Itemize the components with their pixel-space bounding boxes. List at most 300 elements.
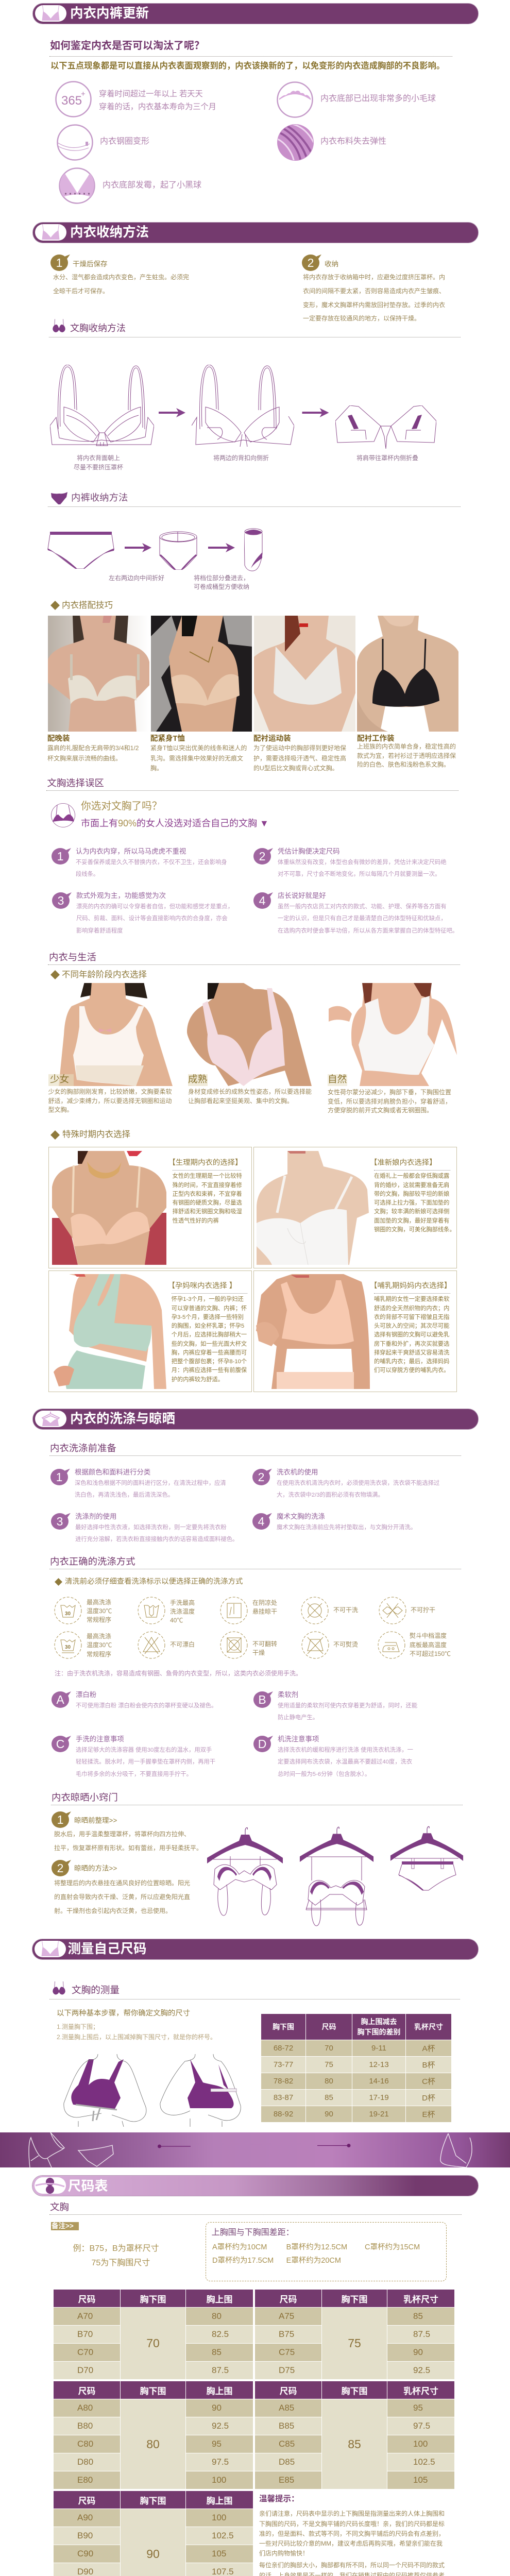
heading: by age: 不同年龄阶段内衣选择 [62,970,147,979]
table: 75: B75 [279,2329,294,2339]
body: 面加垫的文胸，最好是穿着有 [374,1218,449,1224]
body: 文胸；较丰满的新娘可选择侧 [374,1209,449,1215]
arrow [159,408,185,417]
table: 90: 90 [146,2547,160,2561]
panel: menstrual [48,1147,251,1268]
dashed box: cup differences [206,2222,447,2281]
item 4 [252,1513,417,1534]
text [87,1598,112,1625]
text: fabric: 内衣布料失去弹性 [320,137,386,146]
table: 85: 102.5 [413,2457,435,2467]
table: bra size: 85 [325,2093,333,2102]
cup D: D罩杯约为17.5CM [212,2257,274,2265]
text: 温度30℃ [87,1641,112,1649]
text: evening: 露肩的礼服配合无肩带的3/4和1/2 [47,744,139,752]
body: 的哺乳内衣；最后，选择妈妈 [374,1359,449,1365]
step 1: dry then store [50,255,189,295]
table: 85 [255,2381,454,2489]
steps: 1.测量胸下围； [57,2023,99,2030]
text: wearing time [99,90,216,111]
table: 70: B70 [77,2329,93,2339]
table: 90: 105 [212,2549,226,2558]
step 1 title: 干燥后保存 [73,260,107,268]
text: sport [253,744,346,772]
tips paragraph 2 [259,2561,451,2576]
question: 你选对文胸了吗？ [81,801,162,812]
body: 哺乳期的女性一定要选择柔软 [374,1296,449,1302]
icon: purple bra [52,1980,66,1996]
tips paragraph 1: 下胸围的尺码，不是文胸平铺的尺码长度哦！亲，我们的尺码都是标 [259,2520,445,2528]
step 2 title: 收纳 [325,260,338,268]
item 3 [51,1513,236,1546]
title: 店长说好就是好 [278,892,326,900]
banner title: 测量自己尺码 [68,1941,147,1956]
body: 衣的背部不可留下褶皱且无指 [374,1314,449,1320]
badge 2: 2 [308,256,314,269]
badge [51,1513,69,1530]
step 1 body [53,274,189,295]
cup E: E罩杯约为20CM [286,2257,341,2265]
table: 85: C85 [279,2439,295,2449]
body: 择舒适和无钢圈文胸和吸湿 [173,1209,242,1215]
example: 例：B75，B为罩杯尺寸 [73,2244,159,2253]
text: deformed wire: 内衣钢圈变形 [100,137,149,146]
badge [52,848,69,865]
badge [252,1468,270,1485]
tips paragraph 1: 亲们请注意，尺码表中显示的上下胸围是指测量出来的人体上胸围和 [259,2510,445,2517]
table: 90: A90 [77,2513,93,2522]
body: 漂亮的内衣的确可以令穿着者自信，但功能和感觉才是重点， [76,904,233,910]
table: 85: A85 [279,2403,294,2413]
body: 深色和浅色根据不同的面料进行区分，在清洗过程中，应清 [75,1480,226,1486]
note: 注：由于洗衣机洗涤，容易造成有钢圈、鱼骨的内衣变型，所以，这类内衣必须使用手洗。 [55,1670,302,1677]
table: 75 [255,2290,454,2379]
text: mature: 让胸部看起来坚挺美观、集中的文胸。 [188,1097,293,1105]
table: 90: 胸上围 [206,2496,233,2506]
table: 70: D70 [77,2365,93,2375]
body: 护的内裤较为舒适。 [172,1377,224,1383]
caption: 尽量不要挤压罩杯 [74,464,123,471]
badge: A [56,1693,64,1706]
text: 40℃ [170,1617,183,1624]
text: young: 型文胸。 [48,1106,73,1113]
heading: misconceptions: 文胸选择误区 [47,777,104,788]
photo: mature [187,983,312,1086]
text: young: 舒适，减少束缚力，所以要选择无钢圈和运动 [48,1097,172,1105]
body: 体重纵然没有改变，体型也会有微妙的差异，凭估计来决定尺码绝 [278,859,447,866]
caption: 左右两边向中间折好 [109,574,164,582]
table: bra size: D杯 [422,2094,435,2103]
label text: 少女 [50,1074,69,1084]
table: bra size: 83-87 [274,2093,293,2102]
cup B: B罩杯约为12.5CM [286,2243,347,2251]
text: sport: 护，需要选择吸汗透气、稳定性高 [253,754,346,761]
caption: 将档位部分叠进去， [194,574,249,581]
body: 们可以穿脱方便的哺乳内衣。 [374,1367,449,1374]
title: 晾晒前整理>> [74,1817,117,1824]
icon: bra in white pill [35,5,66,22]
body [278,859,447,877]
panel: pregnant [48,1270,251,1392]
body: 影响穿着舒适程度 [76,928,123,934]
table: 85: 胸下围 [341,2386,368,2396]
table: 70: 87.5 [212,2365,229,2375]
table: 85: D85 [279,2457,295,2467]
icon: 365 days: 365 [61,94,82,107]
text: natural: 方便穿脱的前开式文胸或者无钢圈围。 [328,1107,433,1114]
title: 【准新娘内衣选择】 [370,1159,437,1167]
body: 怀孕1-3个月，一般的孕妇还 [172,1296,244,1302]
table: bra size: 14-16 [369,2077,389,2086]
table: 70: 胸上围 [206,2295,233,2304]
step 2 body [303,274,445,322]
title: 洗涤剂的使用 [75,1513,116,1520]
caption: 将肩带往罩杯内侧折叠 [356,454,418,462]
body: 进行充分溶解，若洗衣粉直接接触内衣的话容易造成面料褪色。 [75,1536,238,1543]
body [277,1478,439,1501]
tips paragraph 1: 们店内购物愉快！ [259,2550,309,2557]
body: 最好选择中性洗衣液，如选择洗衣粉，则一定要先将洗衣粉 [75,1524,227,1531]
table: 75: C75 [279,2347,295,2357]
text: natural: 变低，所以要选择对肩膀负担小，穿着舒适， [328,1097,451,1105]
table: 80: B80 [77,2421,93,2431]
illustration: measure bust [159,2054,242,2127]
diagram: panties folded [160,532,197,570]
cup A: A罩杯约为10CM [212,2243,267,2251]
photo: tight T-shirt [151,616,252,732]
text: pilling: 内衣底部已出现非常多的小毛球 [320,94,436,103]
caption [74,454,123,471]
table: 90: 100 [212,2513,226,2522]
item D [253,1736,418,1781]
body [374,1172,455,1234]
body: 拉平，恢复罩杯原有形状。如有蕾丝，用手轻柔抚平。 [54,1844,202,1852]
item B [253,1691,418,1724]
table: 85: 尺码 [279,2386,297,2396]
title: 凭估计胸便决定尺码 [278,848,340,855]
table: 75: 90 [413,2347,423,2357]
cup C: C罩杯约为15CM [365,2243,420,2251]
panel: nursing [253,1270,457,1392]
section banner: washing and drying [33,1409,478,1429]
text: young: 少女的胸部刚刚发育，比较娇嫩，文胸要柔软 [48,1088,172,1095]
caption: 可卷成桶型方便收纳 [194,583,249,590]
body: 胸，内裤应穿着一些高腰而可 [172,1350,247,1356]
step 2 body: 将内衣存放于收纳箱中时，应避免过度挤压罩杯。内 [303,274,445,281]
table: 80: 95 [212,2439,222,2449]
label text: 成熟 [188,1074,207,1084]
text: evening [47,744,139,761]
text: T-shirt: 乳沟。需选择集中效果好的无痕文 [150,754,243,761]
body: 可选择上拉力强，下面加垫的 [374,1200,449,1206]
badge [252,1513,270,1530]
table: 85: 105 [413,2475,428,2485]
table: 75: 92.5 [413,2365,430,2375]
table: 70 [54,2290,253,2379]
section banner: 内衣收纳方法 [33,223,478,242]
section banner: measure size [32,1939,478,1959]
body [76,1744,215,1781]
icon: wash 30 [54,1597,82,1624]
table: bra size: 88-92 [274,2110,293,2119]
body [173,1172,242,1226]
body: 把整个腹部包裹；怀孕8-10个 [172,1359,247,1365]
heading: bra storage: 文胸收纳方法 [70,323,126,333]
body: 背的婚纱，这就需要准备无肩 [374,1182,449,1189]
badge [52,1860,69,1876]
text: 干燥 [252,1649,265,1656]
label: young [48,1074,73,1086]
body: 选择洗衣机的缓和程序进行洗涤 使用洗衣机洗涤，一 [278,1747,413,1753]
table: 70: A70 [77,2311,93,2321]
text [252,1640,277,1658]
body: 钢圈的文胸，可美化胸部线条。 [374,1227,455,1233]
table: bra size: 12-13 [369,2060,389,2069]
photo: evening wear [48,616,149,732]
tips paragraph 1: 准的，但是面料、款式等不同，不同文胸平铺后的尺码会有点差别， [259,2530,445,2537]
body: 对不可靠，尺寸会不断地变化，所以每隔几个月就要测量一次。 [278,871,440,877]
table: bra size: 9-11 [371,2044,386,2053]
table: 80: D80 [77,2457,93,2467]
text: natural [328,1088,451,1115]
item A [52,1691,216,1712]
badge: 1 [56,1470,62,1484]
table: bra size: 78-82 [274,2077,293,2086]
diagram: fold back clasp [192,365,294,447]
caption: evening: 配晚装 [47,735,70,743]
item 4 [253,892,458,934]
item 3 [52,892,233,934]
table: 85: B85 [279,2421,294,2431]
body: 段线条。 [76,871,99,877]
badge: 1 [57,1813,63,1826]
body [54,1827,202,1855]
table: 90: C90 [77,2549,93,2558]
table: 70: 尺码 [78,2295,96,2304]
table: 70: C70 [77,2347,93,2357]
text [410,1632,451,1658]
table: 80: 97.5 [212,2457,229,2467]
text: evening: 杯文胸来展示流畅的曲线。 [47,754,122,761]
title: 款式外观为主，功能感觉为次 [76,892,166,900]
banner title: 内衣收纳方法 [70,225,149,239]
table: 70: 85 [212,2347,222,2357]
diamond [55,1578,62,1586]
caption: 将内衣背面朝上 [77,454,120,462]
diagram: hanger with camisole [299,1825,375,1926]
heading: correct washing: 内衣正确的洗涤方式 [50,1556,135,1567]
text [87,1632,112,1659]
badge: 1 [57,850,63,863]
table: 75: 胸下围 [341,2295,368,2304]
body: 毛巾将多余的水分吸干，不要直接用手拧干。 [76,1771,192,1777]
badge [253,892,271,909]
table: 75: 87.5 [413,2329,430,2339]
table: 90: 尺码 [78,2496,96,2506]
badge [52,1811,69,1828]
badge [50,1468,68,1485]
banner title: 内衣的洗涤与晾晒 [70,1412,175,1426]
body: 的直射会导致内衣干燥、泛黄，所以应避免阳光直 [54,1893,190,1900]
subheading: wash labels: 清洗前必须仔细查看洗涤标示以便选择正确的洗涤方式 [65,1578,243,1586]
photo: work wear [357,616,458,732]
body: 可以穿普通的文胸、内裤；怀 [172,1306,247,1312]
table: 85: 乳杯尺寸 [403,2386,438,2396]
text: mature [188,1088,312,1106]
heading: underwear and life: 内衣与生活 [49,952,96,962]
badge: 2 [259,850,265,863]
box title: 上胸围与下胸围差距： [212,2228,294,2237]
icon: two circles [35,2177,66,2194]
badge: 2 [57,1861,63,1875]
body: 殊的时间，不宜直接穿着修 [173,1182,242,1189]
subheading: five signs: 以下五点现象都是可以直接从内衣表面观察到的，内衣该换新的了，以免变形的内衣造成胸部的不良影响。 [50,61,445,71]
table: bra size: 尺码 [321,2023,336,2031]
table: 70: 胸下围 [140,2295,166,2304]
table: bra size: C杯 [422,2077,435,2086]
body: 择穿起来干爽舒适又容易清洗 [374,1350,449,1356]
heading: panties storage: 内裤收纳方法 [71,492,128,503]
text: young [48,1088,172,1115]
icon: hanger [35,1411,66,1427]
title: 柔软剂 [278,1691,298,1699]
text: 底板最高温度 [410,1641,447,1649]
table: 90: 102.5 [212,2531,234,2540]
body [278,1744,413,1781]
diagram: fold straps [335,405,436,449]
badge: 4 [259,894,265,907]
table: bra size: 68-72 [274,2044,293,2053]
text: sport: 的U型后比文胸或背心式文胸。 [253,765,338,772]
photo: menstrual [52,1151,166,1265]
body: 性透气性好的内裤 [173,1218,219,1224]
item 2 [253,848,447,877]
text [170,1598,195,1625]
text: 最高洗涤 [87,1598,111,1605]
body: 孕3-5个月，要选择一些特别 [172,1314,244,1320]
icon: no bleach [138,1631,165,1659]
body: 虽然一般内衣店员工对内衣的款式、功能、护理、保养等各方面有 [278,904,447,910]
body: 在选购内衣时便会事半功倍，所以从各方面来掌握自己的体型特征吧。 [278,928,458,934]
tips paragraph 2: 每位亲们的胸部大小，胸部都有所不同，所以同一个尺码不同的款式 [259,2562,445,2569]
text: 熨斗中档温度 [410,1632,447,1639]
body: 选择有钢圈的文胸可以避免乳 [374,1332,449,1338]
photo: pregnant [54,1274,166,1389]
icon: purple bra [53,319,65,332]
badge [52,1736,69,1752]
body: 在婚礼上一般都会穿低胸或露 [374,1173,449,1179]
text: work: 险的白色、肤色和浅粉色系文胸。 [357,761,450,768]
heading: tips: 温馨提示： [259,2495,299,2503]
photo: sport wear [254,616,355,732]
statement: 市面上有90%的女人没选对适合自己的文胸 ▼ [81,818,269,828]
text: 不可熨烫 [333,1641,358,1648]
table: 75: 85 [413,2311,423,2321]
label: mature [188,1074,208,1086]
text: sport: 为了使运动中的胸部得到更好地保 [253,744,346,752]
badge: D [258,1737,266,1751]
body: 有钢圈的硬质文胸，尽量选 [173,1200,242,1206]
subheading: 以下两种基本步骤，帮你确定文胸的尺寸 [57,2009,190,2018]
icon: hang dry in shade [220,1597,248,1624]
text: 悬挂晾干 [252,1608,277,1615]
badge: C [56,1737,64,1751]
text: 在阴凉处 [252,1599,277,1606]
step 1 body: 全晾干后才可保存。 [53,287,109,295]
photo: nursing [256,1274,370,1389]
icon: wash 30 gentle: 30 [65,1645,71,1650]
step 2: storage [302,255,445,322]
step 2: method [52,1860,201,1918]
body: 轻轻揉洗。脱水时，用一手握拳垫在罩杯内侧，再用干 [76,1759,215,1765]
icon: no dry clean [301,1597,329,1624]
heading: matching tips: 内衣搭配技巧 [62,601,113,610]
text: 不可翻转 [252,1640,277,1648]
icon: mildew dots [59,167,95,204]
example: 75为下胸围尺寸 [92,2259,150,2267]
text: 常规程序 [87,1616,111,1623]
title: 漂白粉 [76,1691,96,1699]
example [73,2242,159,2270]
table: 80: C80 [77,2439,93,2449]
text: natural: 女性荷尔蒙分泌减少，胸部下垂，下胸围位置 [328,1089,451,1096]
body: 正型内衣和束裤，不宜穿着 [173,1191,242,1197]
table: 80: A80 [77,2403,93,2413]
body: 总时间一般为5-6分钟（包含脱水）。 [278,1771,370,1777]
diagram: panties rolled [244,529,263,571]
body [278,901,458,937]
body: 将整理后的内衣悬挂在通风良好的位置晾晒。阳光 [54,1879,190,1887]
title: 认为内衣内穿，所以马马虎虎不重视 [76,848,186,855]
banner title: 尺码表 [68,2178,108,2194]
table: bra size: 17-19 [369,2093,389,2102]
diamond [50,970,60,979]
heading: preparation: 内衣洗涤前准备 [50,1443,116,1453]
table: bra size: 90 [325,2110,333,2119]
body: 大，洗衣袋中2/3的面积必须有衣物填满。 [277,1492,384,1498]
icon: iron medium [378,1631,405,1659]
body [374,1295,449,1376]
banner title: 内衣内裤更新 [70,6,149,21]
table: 80: 90 [212,2403,222,2413]
illustration: measure underbust [63,2054,149,2127]
label text: 自然 [328,1074,347,1084]
text: mildew: 内衣底部发霉，起了小黑球 [103,180,201,190]
body [75,1522,238,1546]
table: bra size: 73-77 [274,2060,293,2069]
table: 80: 胸上围 [206,2386,233,2396]
table: 85: 97.5 [413,2421,430,2431]
section banner: 内衣内裤更新 [33,4,478,24]
step 2 body: 变形，魔术文胸罩杯内需放回衬垫存放。过季的内衣 [303,301,445,308]
body: 带的文胸，胸部较平坦的新娘 [374,1191,449,1197]
photo: natural [329,983,457,1086]
diagram: panties flat [47,532,114,569]
table: 85: 100 [413,2439,428,2449]
table: 80: 尺码 [78,2386,96,2396]
steps: 2.测量胸上围后，以上围减掉胸下围尺寸，就是你的杯号。 [57,2033,216,2041]
table: bra size [261,2014,451,2122]
table: bra size: 胸上围减去 [361,2018,397,2026]
badge: 3 [58,894,64,907]
text: wearing time: 穿着的话，内衣基本寿命为三个月 [99,102,216,111]
body: 选择足够大的洗涤容器 使用30度左右的温水，用双手 [76,1747,212,1753]
table: 75: 75 [348,2336,361,2350]
body: 魔术文胸在洗涤前应先将衬垫取出，与文胸分开清洗。 [277,1524,416,1531]
diagram: bra back up [50,365,154,446]
diagram: hanger with panties [388,1824,465,1891]
badge: B [258,1693,266,1706]
